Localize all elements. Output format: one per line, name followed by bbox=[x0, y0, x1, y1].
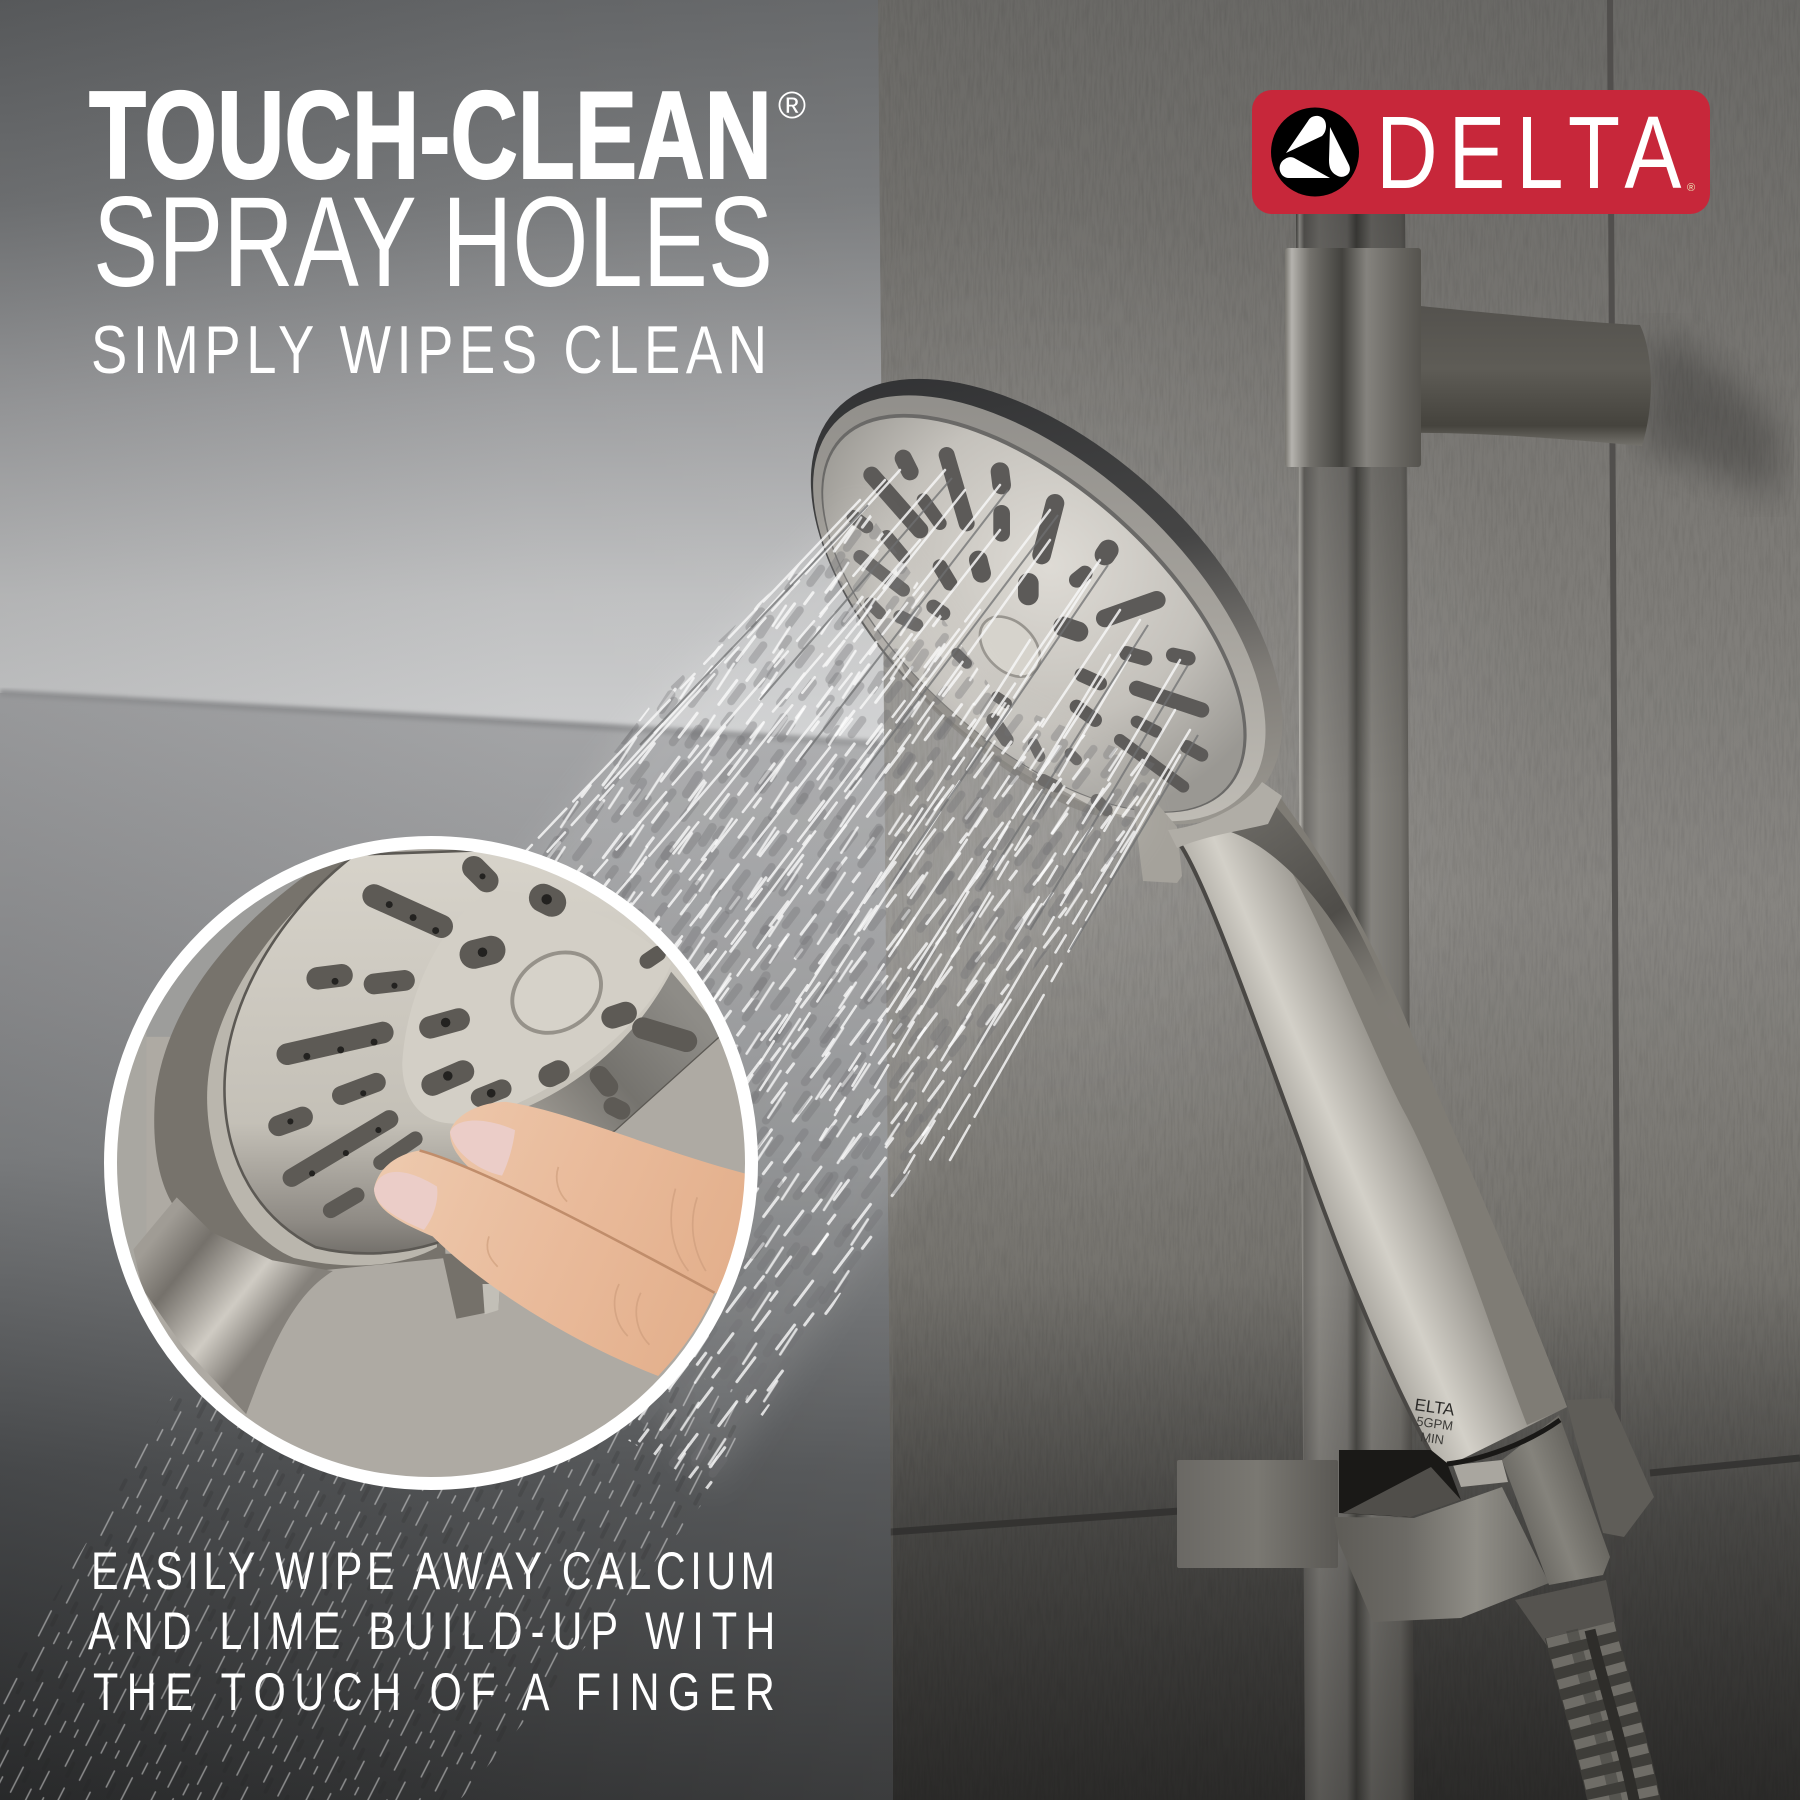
center dome bbox=[968, 605, 1052, 688]
reflective face section bbox=[528, 972, 718, 1131]
bracket opening bbox=[1339, 1450, 1461, 1517]
fingernails bbox=[450, 1120, 515, 1176]
hose connector bbox=[1515, 1580, 1617, 1653]
white circle ring bbox=[110, 842, 752, 1484]
water spray bbox=[0, 470, 1198, 1800]
lower finger bbox=[374, 1150, 715, 1376]
bottom caption bbox=[88, 1542, 775, 1722]
subtitle: SIMPLY WIPES CLEAN bbox=[91, 312, 767, 388]
bottom caption: THE TOUCH OF A FINGER bbox=[93, 1663, 775, 1722]
handle imprint: 5GPM bbox=[1415, 1414, 1454, 1434]
registered mark: ® bbox=[778, 85, 806, 127]
upper finger bbox=[450, 1102, 745, 1301]
head face bbox=[757, 348, 1310, 882]
holder cradle bbox=[1334, 1487, 1549, 1622]
head lower reflective band bbox=[900, 660, 1113, 817]
slide bracket bbox=[1177, 1460, 1338, 1568]
spray haze bbox=[430, 500, 1150, 1492]
left rail strip bbox=[144, 1031, 146, 1036]
holder and bracket bbox=[1177, 1398, 1654, 1800]
handle imprint: ELTA bbox=[1413, 1395, 1456, 1420]
collar back fin bbox=[1566, 1398, 1654, 1537]
handle imprint: MIN bbox=[1419, 1429, 1445, 1447]
wall support arm bbox=[1410, 305, 1651, 446]
spray hole slots bbox=[853, 455, 1202, 810]
hand shower handle bbox=[1177, 790, 1567, 1470]
small registered mark: ® bbox=[1687, 182, 1695, 194]
hand shower neck inset bbox=[133, 1197, 333, 1414]
inset hook bbox=[442, 1254, 500, 1319]
slide rail bbox=[1296, 200, 1414, 1800]
handle neck bbox=[1168, 782, 1282, 848]
head face inset bbox=[224, 846, 723, 1253]
concrete wall panel bbox=[878, 0, 1800, 1800]
title bbox=[89, 67, 806, 388]
upper droplets bbox=[400, 500, 1170, 1492]
title line: spray holes: SPRAY HOLES bbox=[93, 171, 773, 314]
left background panel bbox=[0, 0, 900, 1800]
shadow of wall arm bbox=[1640, 330, 1780, 500]
bottom caption: EASILY WIPE AWAY CALCIUM bbox=[91, 1542, 775, 1601]
head hook bbox=[1133, 795, 1182, 883]
inset circle: finger wiping spray holes bbox=[104, 836, 758, 1490]
delta logo badge bbox=[1252, 90, 1710, 214]
knuckle creases bbox=[487, 1167, 706, 1345]
title line: touch-clean: TOUCH-CLEAN bbox=[89, 67, 772, 205]
slot spray nozzles bbox=[287, 873, 552, 1177]
lower wall shading bbox=[893, 1280, 1800, 1800]
long water streaks bbox=[470, 470, 1190, 1180]
head rim bbox=[731, 296, 1362, 908]
inset slots bbox=[279, 868, 686, 1210]
handle collar bbox=[1502, 1415, 1610, 1585]
hose bbox=[1572, 1630, 1636, 1800]
delta emblem bbox=[1271, 108, 1359, 196]
handle imprint bbox=[1409, 1395, 1457, 1448]
circle contents bbox=[117, 849, 745, 1477]
bottom caption: AND LIME BUILD-UP WITH bbox=[88, 1602, 775, 1661]
delta wordmark: DELTA bbox=[1376, 96, 1681, 211]
shower head bbox=[731, 296, 1362, 908]
head rim inset bbox=[154, 846, 446, 1271]
crossing droplets bbox=[400, 500, 1170, 1492]
lower droplets bbox=[0, 1190, 760, 1800]
rail collar bbox=[1285, 248, 1421, 467]
central dome inset bbox=[402, 1022, 628, 1124]
